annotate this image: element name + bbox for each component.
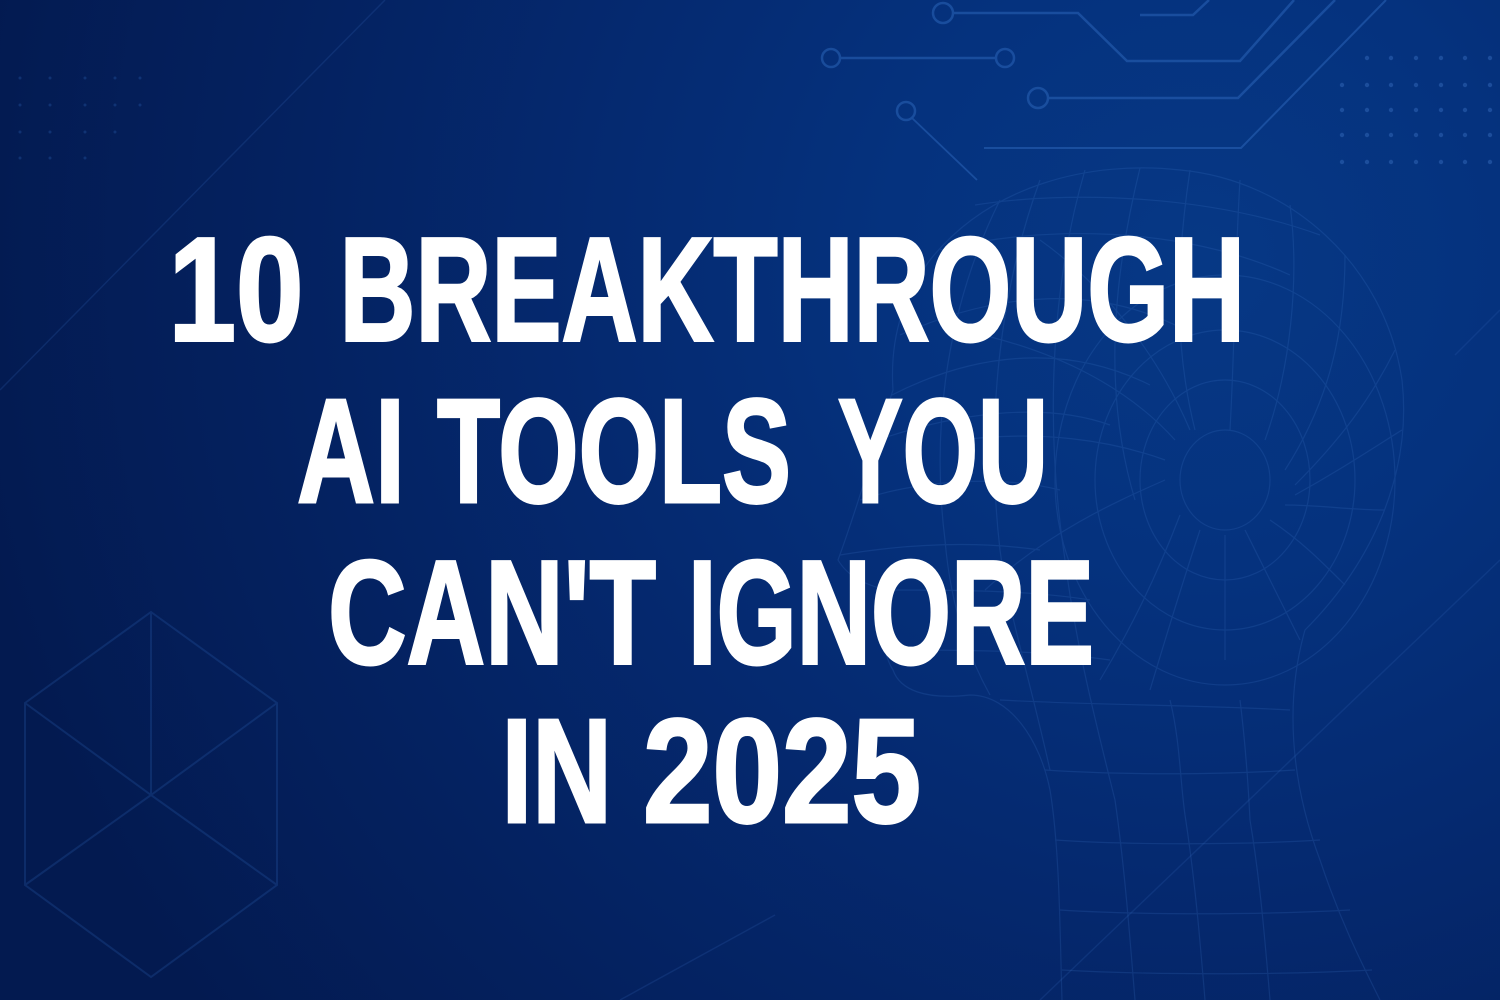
icon: wireframe cube [25,612,277,977]
title line 1 [168,208,1245,372]
title [168,208,1245,854]
circuit lines [822,0,1386,180]
title line 2 [297,369,1048,534]
title line 3 [328,530,1094,696]
title line 2: TOOLS [437,369,791,534]
title line 2: YOU [838,369,1048,534]
dot grid: top left [18,76,142,160]
title line 3: CAN'T [328,530,656,696]
title line 1: 10 [168,208,304,372]
title line 3: IGNORE [688,530,1094,696]
title line 4: IN [502,689,612,854]
icon: wireframe head [838,168,1404,1000]
dot grid: top right [1340,56,1492,164]
title line 2: AI [297,369,405,534]
title line 4: 2025 [643,689,921,854]
title line 4 [502,689,921,854]
